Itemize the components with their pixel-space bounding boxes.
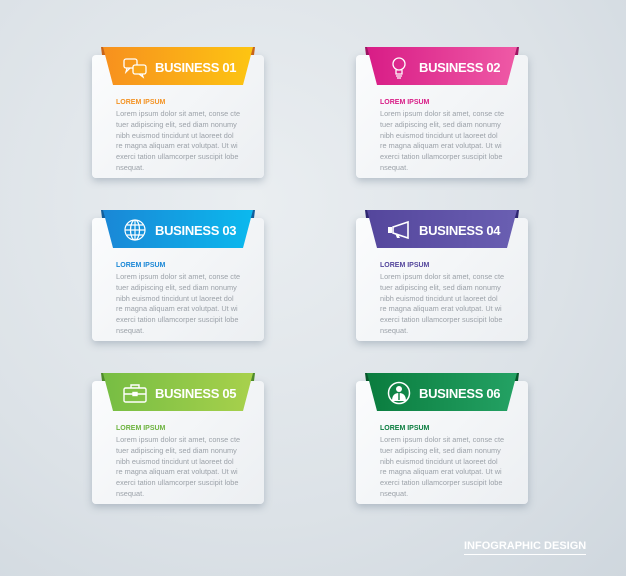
tab: business 03 (101, 210, 255, 248)
text block: re magna aliquam erat volutpat. Ut wi (116, 467, 238, 476)
heading: LOREM IPSUM (116, 99, 165, 106)
text block (380, 272, 504, 335)
text block: re magna aliquam erat volutpat. Ut wi (116, 304, 238, 313)
text block: re magna aliquam erat volutpat. Ut wi (380, 304, 502, 313)
text block: Lorem ipsum dolor sit amet, conse cte (116, 109, 240, 118)
tab: business 02 (365, 47, 519, 85)
text block: re magna aliquam erat volutpat. Ut wi (380, 467, 502, 476)
text block: Lorem ipsum dolor sit amet, conse cte (380, 435, 504, 444)
text block: re magna aliquam erat volutpat. Ut wi (116, 141, 238, 150)
text block: nibh euismod tincidunt ut laoreet dol (116, 457, 234, 466)
text block (380, 109, 504, 172)
heading: LOREM IPSUM (380, 262, 429, 269)
text block: exerci tation ullamcorper suscipit lobe (380, 152, 502, 161)
text block: re magna aliquam erat volutpat. Ut wi (380, 141, 502, 150)
heading: LOREM IPSUM (380, 99, 429, 106)
heading: LOREM IPSUM (380, 425, 429, 432)
text block: tuer adipiscing elit, sed diam nonumy (116, 446, 237, 455)
text block: nibh euismod tincidunt ut laoreet dol (116, 294, 234, 303)
text block: nsequat. (380, 326, 408, 335)
text block: Lorem ipsum dolor sit amet, conse cte (380, 272, 504, 281)
title: business 06: BUSINESS 06 (419, 386, 500, 401)
tab: business 04 (365, 210, 519, 248)
text block: nsequat. (380, 163, 408, 172)
text block: tuer adipiscing elit, sed diam nonumy (380, 120, 501, 129)
heading: LOREM IPSUM (116, 262, 165, 269)
text block: tuer adipiscing elit, sed diam nonumy (116, 120, 237, 129)
heading: LOREM IPSUM (116, 425, 165, 432)
text block: nsequat. (116, 326, 144, 335)
panel: business 03 (88, 210, 268, 348)
icon: chat bubbles (123, 58, 147, 79)
text block: nibh euismod tincidunt ut laoreet dol (380, 294, 498, 303)
icon: briefcase (123, 384, 147, 403)
text block: tuer adipiscing elit, sed diam nonumy (380, 446, 501, 455)
text block: Lorem ipsum dolor sit amet, conse cte (116, 435, 240, 444)
text block: exerci tation ullamcorper suscipit lobe (380, 478, 502, 487)
text block: exerci tation ullamcorper suscipit lobe (116, 315, 238, 324)
title: business 03: BUSINESS 03 (155, 223, 236, 238)
title: business 04: BUSINESS 04 (419, 223, 500, 238)
text block (116, 435, 240, 498)
panel: business 05 (88, 373, 268, 511)
text block (380, 435, 504, 498)
text block: exerci tation ullamcorper suscipit lobe (116, 152, 238, 161)
text block: tuer adipiscing elit, sed diam nonumy (380, 283, 501, 292)
panel: business 01 (88, 47, 268, 185)
text block: Lorem ipsum dolor sit amet, conse cte (116, 272, 240, 281)
title: business 05: BUSINESS 05 (155, 386, 236, 401)
text block: nibh euismod tincidunt ut laoreet dol (380, 457, 498, 466)
text block: nsequat. (116, 163, 144, 172)
panel: business 04 (352, 210, 532, 348)
text block: nsequat. (380, 489, 408, 498)
text block: exerci tation ullamcorper suscipit lobe (116, 478, 238, 487)
text block (116, 109, 240, 172)
title: business 01: BUSINESS 01 (155, 60, 236, 75)
icon: megaphone (388, 220, 409, 240)
panel: business 02 (352, 47, 532, 185)
footer title: INFOGRAPHIC DESIGN (464, 540, 586, 552)
text block: nsequat. (116, 489, 144, 498)
text block: nibh euismod tincidunt ut laoreet dol (380, 131, 498, 140)
text block: nibh euismod tincidunt ut laoreet dol (116, 131, 234, 140)
tab: business 01 (101, 47, 255, 85)
tab: business 06 (365, 373, 519, 411)
text block (116, 272, 240, 335)
panel: business 06 (352, 373, 532, 511)
icon: light bulb (392, 57, 406, 79)
icon: person (388, 382, 410, 404)
text block: Lorem ipsum dolor sit amet, conse cte (380, 109, 504, 118)
title: business 02: BUSINESS 02 (419, 60, 500, 75)
tab: business 05 (101, 373, 255, 411)
text block: tuer adipiscing elit, sed diam nonumy (116, 283, 237, 292)
icon: globe (124, 219, 146, 241)
text block: exerci tation ullamcorper suscipit lobe (380, 315, 502, 324)
